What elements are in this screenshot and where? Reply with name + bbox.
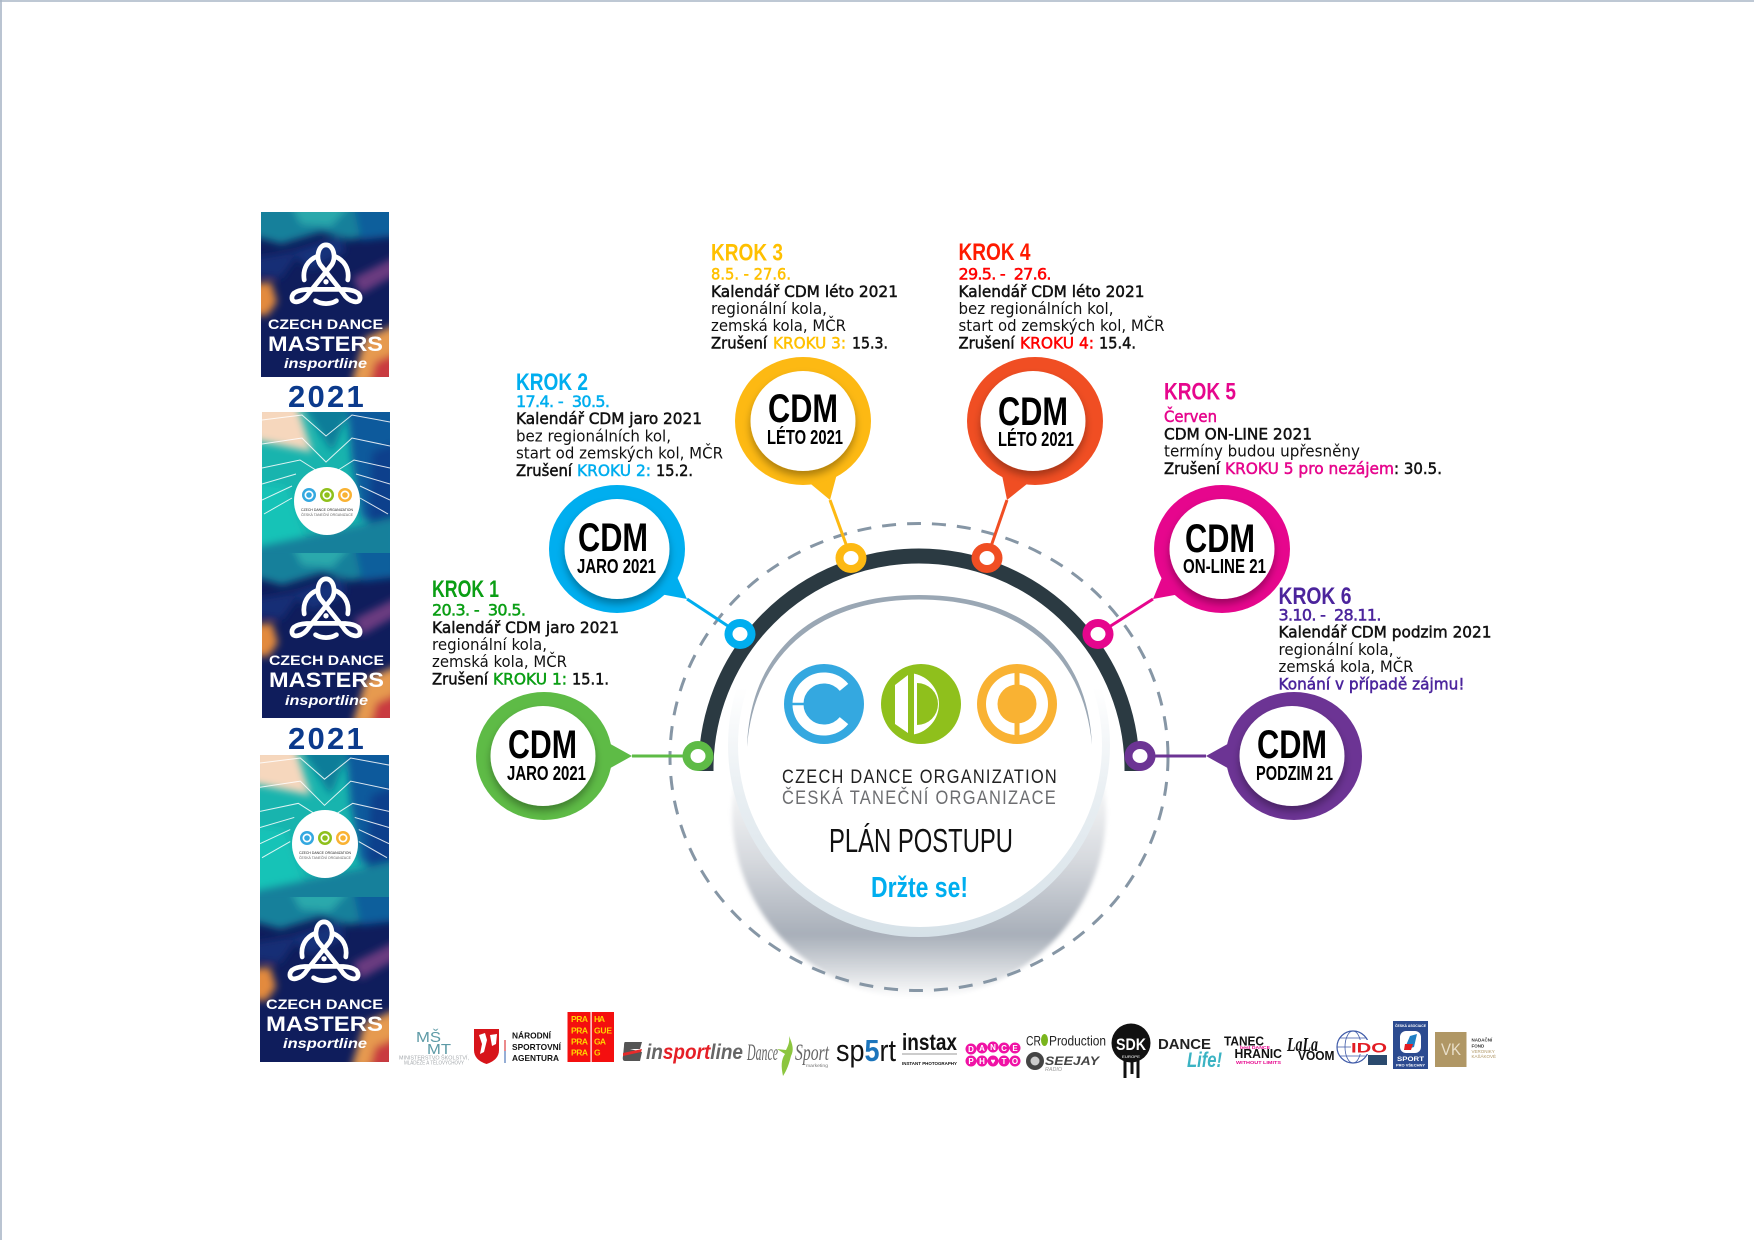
icon: masters emblem [290,922,358,981]
logo: sport: sp5rt [836,1033,896,1068]
logo: instax: instax [902,1029,957,1055]
text block: KROK 4: KROK 4 [958,239,1031,266]
logo: VK foundation: VERONIKY [1472,1049,1495,1054]
text block: KROK 2: start od zemských kol, MČR [516,444,723,462]
logo: VK foundation [1435,1032,1496,1067]
year label 1: 2021 [288,379,364,414]
icon: masters emblem [292,245,360,304]
logo: Dance Life [1158,1036,1222,1072]
logo: DanceSport: marketing [806,1063,829,1068]
logo: Tanec hranic: TANEC [1224,1034,1265,1048]
text block: KROK 5: termíny budou upřesněny [1164,442,1360,460]
pin: step 1 green [476,692,710,820]
banner 3: CZECH DANCE [266,997,383,1012]
logo: Praha: GUE [594,1026,612,1036]
timeline arc [706,556,1132,771]
logo: dance photo: E [1012,1044,1018,1053]
disc rim [728,553,1110,937]
logo: SDK [1112,1024,1150,1078]
icon: masters emblem [292,579,360,638]
logo: dance photo: H [979,1057,985,1066]
logo: Tanec hranic [1224,1034,1283,1066]
banner 3: MASTERS [266,1013,383,1036]
logo: dance photo: P [968,1057,974,1066]
text block: KROK 1: Zrušení [432,670,489,688]
text block: KROK 3: KROKU 3: [773,334,846,352]
logo: dance photo: T [1002,1057,1007,1066]
logo: Dance Life: Life! [1187,1049,1222,1072]
disc face [738,563,1102,927]
logo: instax [902,1029,957,1066]
logo: insportline: insportline [646,1041,743,1064]
logo: MSMT: MINISTERSTVO ŠKOLSTVÍ, [399,1054,469,1062]
text block: KROK 1 [432,576,619,688]
logo: dance photo: N [990,1043,996,1052]
slogan: Držte se! [871,872,968,904]
logo: DanceSport [746,1036,829,1076]
text block: KROK 4: 29.5. - 27.6. [958,264,1052,284]
organisation name: CZECH DANCE ORGANIZATION [782,766,1058,788]
banner 1: Czech Dance Masters [253,204,397,384]
text block: KROK 6: zemská kola, MČR [1278,657,1414,676]
logo: MSMT: MLÁDEŽE A TĚLOVÝCHOVY [404,1058,465,1066]
logo: Tanec hranic: HRANIC [1234,1046,1283,1061]
logo: Sport pro vsechny: PRO VŠECHNY [1396,1062,1425,1068]
logo: Seejay: SEEJAY [1045,1054,1100,1068]
logo: instax: INSTANT PHOTOGRAPHY [902,1061,957,1066]
text block: KROK 4: Zrušení [958,334,1015,352]
banner 3 [252,747,397,1069]
pin: step 2 blue [549,485,752,645]
logo: Dance Life: DANCE [1158,1036,1211,1053]
logo: Praha: HA [594,1014,605,1024]
text block: KROK 1: Kalendář CDM jaro 2021 [432,618,619,637]
logo: national sports agency [474,1029,562,1064]
panel: sponsor logos [399,1012,1496,1078]
pin: step 3 yellow [735,357,871,569]
logo: Praha: GA [594,1036,606,1046]
text block: KROK 4: KROKU 4: [1020,334,1094,352]
text block: KROK 4: start od zemských kol, MČR [958,316,1164,335]
logo: Praha: PRA [571,1026,588,1036]
logo: national sports agency: SPORTOVNÍ [512,1042,562,1052]
logo: national sports agency: NÁRODNÍ [512,1030,552,1040]
logo: Sport pro vsechny [1393,1021,1428,1069]
logo: CRO Production: CR [1026,1034,1041,1048]
banner 2 [254,404,398,725]
logo: Seejay: RADIO [1045,1067,1063,1073]
text block: KROK 3: 15.3. [852,334,888,352]
banner 2: insportline [285,692,368,708]
logo: LaLa Voom [1286,1034,1334,1063]
text block: KROK 5: Červen [1164,407,1217,426]
text block: KROK 1: KROK 1 [432,576,499,603]
text block: KROK 2: KROK 2 [516,369,588,396]
logo: DanceSport: Sport [795,1040,829,1065]
text block: KROK 5: : 30.5. [1394,459,1442,478]
logo: dance photo: D [968,1045,974,1054]
logo: dance photo: ♥ [991,1057,996,1066]
panel: left banners [252,204,398,1069]
text block: KROK 2: 17.4. - 30.5. [516,392,610,411]
logo: Praha: PRA [571,1036,588,1046]
organisation badge: ČESKÁ TANEČNÍ ORGANIZACE [299,855,351,860]
text block: KROK 1: KROKU 1: [493,670,567,688]
organisation name in Czech: ČESKÁ TANEČNÍ ORGANIZACE [782,786,1057,809]
logo: dance photo: A [979,1044,985,1053]
text block: KROK 2: KROKU 2: [577,461,651,480]
banner 1: Czech Dance Masters: MASTERS [268,333,383,356]
logo: SDK: SDK [1116,1035,1147,1054]
dashed orbit [670,524,1168,990]
banner 3: insportline [283,1035,367,1051]
text block: KROK 3: Zrušení [711,334,768,352]
text block: KROK 3 [711,240,898,352]
logo: MSMT: MT [427,1041,451,1058]
banner 2: MASTERS [269,669,384,692]
logo: MSMT [399,1029,469,1066]
logo: Sport pro vsechny: ČESKÁ ASOCIACE [1395,1023,1426,1028]
text block: KROK 2: Kalendář CDM jaro 2021 [516,409,702,428]
text block: KROK 4: 15.4. [1099,334,1136,352]
text block: KROK 5: KROK 5 [1164,378,1236,406]
text block: KROK 5: CDM ON-LINE 2021 [1164,424,1312,444]
pin: step 6 purple: CDM [1257,723,1327,767]
text block: KROK 2: bez regionálních kol, [516,426,671,446]
logo: D [881,664,961,744]
text block: KROK 4: bez regionálních kol, [958,299,1114,318]
heading: PLÁN POSTUPU [829,822,1013,859]
year label 2: 2021 [288,721,364,756]
text block: KROK 3: KROK 3 [711,240,783,266]
logo: VK foundation: VK [1441,1040,1462,1059]
text block: KROK 1: zemská kola, MČR [432,652,567,671]
text block: KROK 3: zemská kola, MČR [711,316,846,335]
banner 2: CZECH DANCE [269,653,384,668]
logo: IDO [1337,1031,1387,1065]
organisation badge [292,810,358,878]
disc shadow [732,626,1106,998]
pin: step 6 purple: PODZIM 21 [1256,762,1333,785]
text block: KROK 3: Kalendář CDM léto 2021 [711,282,898,301]
text block: KROK 3: 8.5. - 27.6. [711,264,791,284]
grey crescent [747,595,1092,747]
text block: KROK 6: regionální kola, [1278,640,1394,659]
logo: Praha: PRA [571,1048,588,1058]
logo: VK foundation: KAŠÁKOVÉ [1472,1053,1496,1059]
logo: Praha: PRA [571,1014,588,1024]
pin: step 5 magenta: CDM [1185,517,1255,561]
text block: KROK 6: 3.10. - 28.11. [1278,606,1382,624]
organisation badge: CZECH DANCE ORGANIZATION [299,850,351,855]
text block: KROK 2: Zrušení [516,461,573,480]
text block: KROK 6: KROK 6 [1278,583,1352,610]
text block: KROK 2: 15.2. [656,461,693,480]
text block: KROK 4 [958,239,1164,352]
logo: dance photo [966,1042,1020,1066]
pin: step 3 yellow: CDM [768,387,838,431]
pin: step 4 red: LÉTO 2021 [998,428,1074,451]
text block: KROK 1: regionální kola, [432,635,547,654]
text block: KROK 6: Konání v případě zájmu! [1278,674,1464,694]
pin: step 5 magenta [1086,485,1290,645]
pin: step 4 red [967,357,1103,569]
text block: KROK 5: KROKU 5 pro nezájem [1225,459,1394,478]
logo: Praha: G [594,1048,601,1058]
logo: national sports agency: AGENTURA [512,1053,559,1063]
text block: KROK 2 [516,369,723,480]
text block: KROK 6 [1278,583,1492,694]
logo: O [977,664,1057,744]
logo: MSMT: MŠ [416,1029,441,1046]
text block: KROK 4: Kalendář CDM léto 2021 [958,282,1144,301]
panel: central disc [670,524,1168,998]
text block: KROK 1: 20.3. - 30.5. [432,600,526,620]
text block: KROK 5: Zrušení [1164,459,1221,478]
logo: dance photo: C [1001,1044,1007,1053]
banner 1: Czech Dance Masters: insportline [284,355,367,371]
pin: step 4 red: CDM [998,390,1068,434]
organisation badge: ČESKÁ TANEČNÍ ORGANIZACE [301,512,353,517]
logo: SDK: EUROPE [1122,1054,1140,1059]
logo: dance photo: O [1012,1057,1018,1066]
pin: step 3 yellow: LÉTO 2021 [767,426,843,449]
text block: KROK 5 [1164,378,1442,478]
logo: DanceSport: Dance [746,1040,778,1065]
text block: KROK 6: Kalendář CDM podzim 2021 [1278,622,1492,642]
organisation badge [294,467,360,535]
logo: C [784,664,864,744]
pin: step 5 magenta: ON-LINE 21 [1183,555,1266,578]
pin: step 6 purple [1128,692,1362,820]
logo: CRO Production: Production [1049,1034,1106,1048]
logo: Tanec hranic: best DANCE [1240,1045,1270,1050]
text block: KROK 3: regionální kola, [711,299,827,318]
logo: LaLa Voom: VOOM [1298,1048,1334,1063]
pin: step 2 blue: JARO 2021 [577,555,656,578]
logo: Seejay [1026,1052,1100,1073]
logo: CRO Production [1026,1034,1106,1048]
pin: step 1 green: CDM [508,723,577,767]
logo: Tanec hranic: WITHOUT LIMITS [1236,1060,1282,1066]
logo: VK foundation: FOND [1472,1044,1485,1048]
pin: step 1 green: JARO 2021 [507,762,586,785]
logo: VK foundation: NADAČNÍ [1472,1036,1493,1042]
logo: Praha [568,1012,614,1062]
logo: LaLa Voom: LaLa [1286,1034,1318,1056]
organisation badge: CZECH DANCE ORGANIZATION [301,507,353,512]
logo: Sport pro vsechny: SPORT [1397,1056,1424,1063]
pin: step 2 blue: CDM [578,516,648,560]
banner 1: Czech Dance Masters: CZECH DANCE [268,317,383,332]
text block: KROK 1: 15.1. [572,670,609,688]
logo: IDO: IDO [1351,1040,1387,1056]
